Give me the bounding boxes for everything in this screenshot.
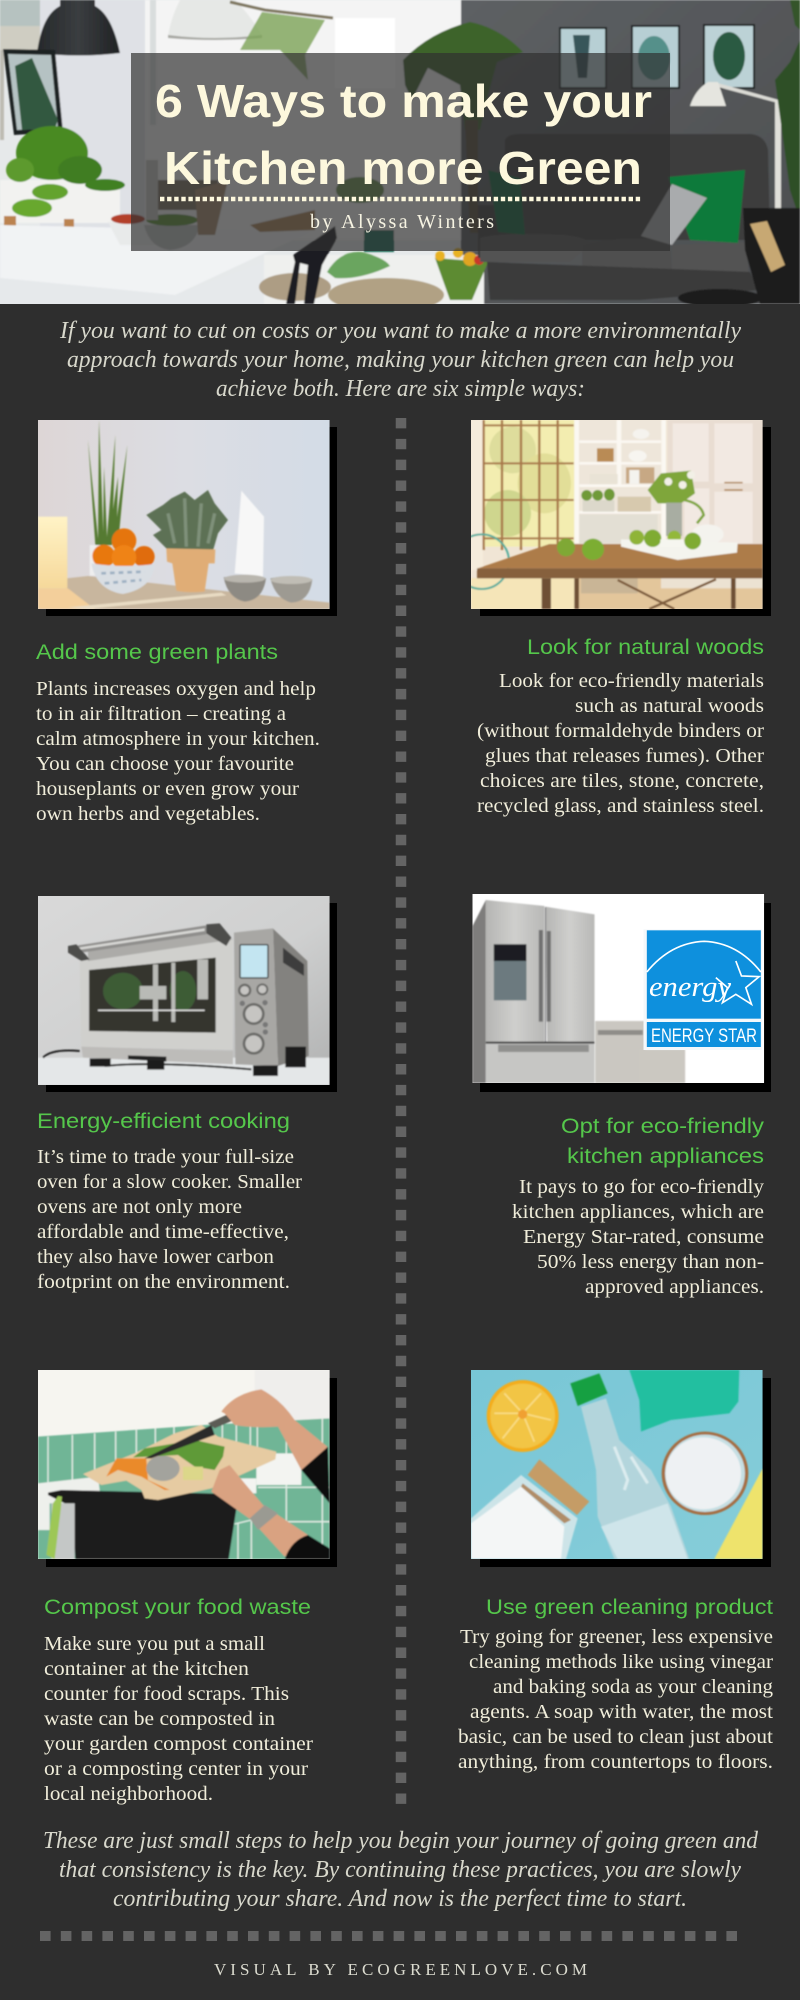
body text: waste can be composted in [44, 1708, 275, 1730]
body text: choices are tiles, stone, concrete, [480, 770, 764, 792]
panel: Energy-efficient cooking [37, 896, 337, 1293]
body text: Plants increases oxygen and help [36, 678, 316, 700]
heading: Energy-efficient cooking [37, 1109, 290, 1133]
title: 6 Ways to make your [155, 75, 652, 127]
body text: Make sure you put a small [44, 1633, 265, 1655]
body text: houseplants or even grow your [36, 778, 299, 800]
body text: approved appliances. [585, 1276, 764, 1298]
byline: by Alyssa Winters [310, 211, 494, 233]
body text: It pays to go for eco-friendly [519, 1176, 765, 1198]
body text: agents. A soap with water, the most [470, 1701, 773, 1723]
wall pictures [559, 27, 607, 89]
body text: recycled glass, and stainless steel. [477, 795, 764, 817]
body text: anything, from countertops to floors. [458, 1751, 773, 1773]
closing text: contributing your share. And now is the perfect time to start. [113, 1886, 687, 1912]
photo: countertop oven [38, 896, 330, 1085]
body text: ovens are not only more [37, 1196, 242, 1218]
tree [403, 22, 523, 130]
heading: kitchen appliances [567, 1144, 764, 1168]
right plant [775, 40, 800, 220]
floor, rugs and cushion [264, 255, 484, 304]
horizontal dotted divider [40, 1931, 739, 1941]
panel: Use green cleaning product [458, 1370, 773, 1773]
panel: Add some green plants [36, 420, 337, 825]
body text: such as natural woods [575, 695, 764, 717]
body text: basic, can be used to clean just about [458, 1726, 773, 1748]
panel: Opt for eco-friendly kitchen appliances [472, 894, 771, 1298]
panel: Look for natural woods [454, 420, 771, 817]
body text: You can choose your favourite [36, 753, 294, 775]
closing text: These are just small steps to help you begin your journey of going green and [43, 1828, 759, 1854]
piano [743, 208, 800, 304]
body text: they also have lower carbon [37, 1246, 274, 1268]
body text [36, 678, 320, 825]
fern frame [3, 49, 63, 135]
body text: (without formaldehyde binders or [477, 720, 764, 742]
body text: Energy Star-rated, consume [523, 1226, 764, 1248]
heading: Compost your food waste [44, 1595, 311, 1619]
photo shadow [480, 427, 771, 616]
chair [286, 226, 337, 304]
body text: oven for a slow cooker. Smaller [37, 1171, 302, 1193]
body text: Try going for greener, less expensive [460, 1626, 773, 1648]
photo shadow [46, 1378, 337, 1567]
photo shadow [480, 903, 771, 1092]
photo shadow [480, 1378, 771, 1567]
hanging fern [230, 2, 333, 18]
heading: Opt for eco-friendly [561, 1114, 764, 1138]
body text: local neighborhood. [44, 1783, 213, 1805]
planter and plant [0, 180, 120, 223]
vertical dotted divider [396, 418, 406, 1804]
photo: refrigerator and Energy Star label [472, 894, 764, 1083]
intro text [59, 318, 741, 402]
body text: cleaning methods like using vinegar [469, 1651, 773, 1673]
body text: container at the kitchen [44, 1658, 249, 1680]
energy star wordmarks: energy [649, 972, 732, 1003]
body text: or a composting center in your [44, 1758, 308, 1780]
intro text: If you want to cut on costs or you want to make a more environmentally [59, 318, 741, 344]
closing text [43, 1828, 759, 1912]
sofa [505, 134, 770, 240]
heading [561, 1114, 764, 1168]
title [155, 75, 652, 194]
intro text: achieve both. Here are six simple ways: [216, 376, 585, 402]
photo: plants and oranges [38, 420, 330, 609]
closing text: that consistency is the key. By continuing these practices, you are slowly [59, 1857, 741, 1883]
body text: your garden compost container [44, 1733, 313, 1755]
body text: 50% less energy than non- [537, 1251, 764, 1273]
photo: lemon, vinegar and baking soda [471, 1370, 763, 1559]
footer credit: VISUAL BY ECOGREENLOVE.COM [214, 1960, 587, 1979]
bowls [110, 224, 131, 244]
body text [477, 670, 764, 817]
body text: kitchen appliances, which are [512, 1201, 764, 1223]
body text: and baking soda as your cleaning [493, 1676, 773, 1698]
body text [458, 1626, 773, 1773]
heading: Use green cleaning product [486, 1595, 773, 1619]
body text: glues that releases fumes). Other [485, 745, 764, 767]
cushions [488, 170, 525, 235]
body text: It’s time to trade your full-size [37, 1146, 294, 1168]
title box [131, 53, 670, 251]
body text: to in air filtration – creating a [36, 703, 286, 725]
body text: Look for eco-friendly materials [499, 670, 764, 692]
tulips [435, 258, 488, 300]
photo: refrigerator and Energy Star label: ENERGY STAR [651, 1026, 757, 1047]
body text: own herbs and vegetables. [36, 803, 260, 825]
heading: Look for natural woods [527, 635, 764, 659]
table [0, 224, 268, 294]
panel: Compost your food waste [38, 1370, 337, 1805]
body text: counter for food scraps. This [44, 1683, 289, 1705]
heading: Add some green plants [36, 640, 278, 664]
body text: calm atmosphere in your kitchen. [36, 728, 320, 750]
photo: sunny kitchen with wooden table [454, 420, 763, 609]
body text [512, 1176, 765, 1298]
body text: affordable and time-effective, [37, 1221, 289, 1243]
title: Kitchen more Green [164, 142, 642, 194]
items behind overlay [146, 160, 158, 220]
floor lamp [718, 83, 778, 103]
photo shadow [46, 903, 337, 1092]
intro text: approach towards your home, making your kitchen green can help you [67, 347, 734, 373]
body text: footprint on the environment. [37, 1271, 290, 1293]
photo: scraping food scraps into a compost bin [38, 1370, 330, 1559]
header photo: kitchen and living room [0, 0, 800, 312]
body text [37, 1146, 302, 1293]
body text [44, 1633, 313, 1805]
photo shadow [46, 427, 337, 616]
